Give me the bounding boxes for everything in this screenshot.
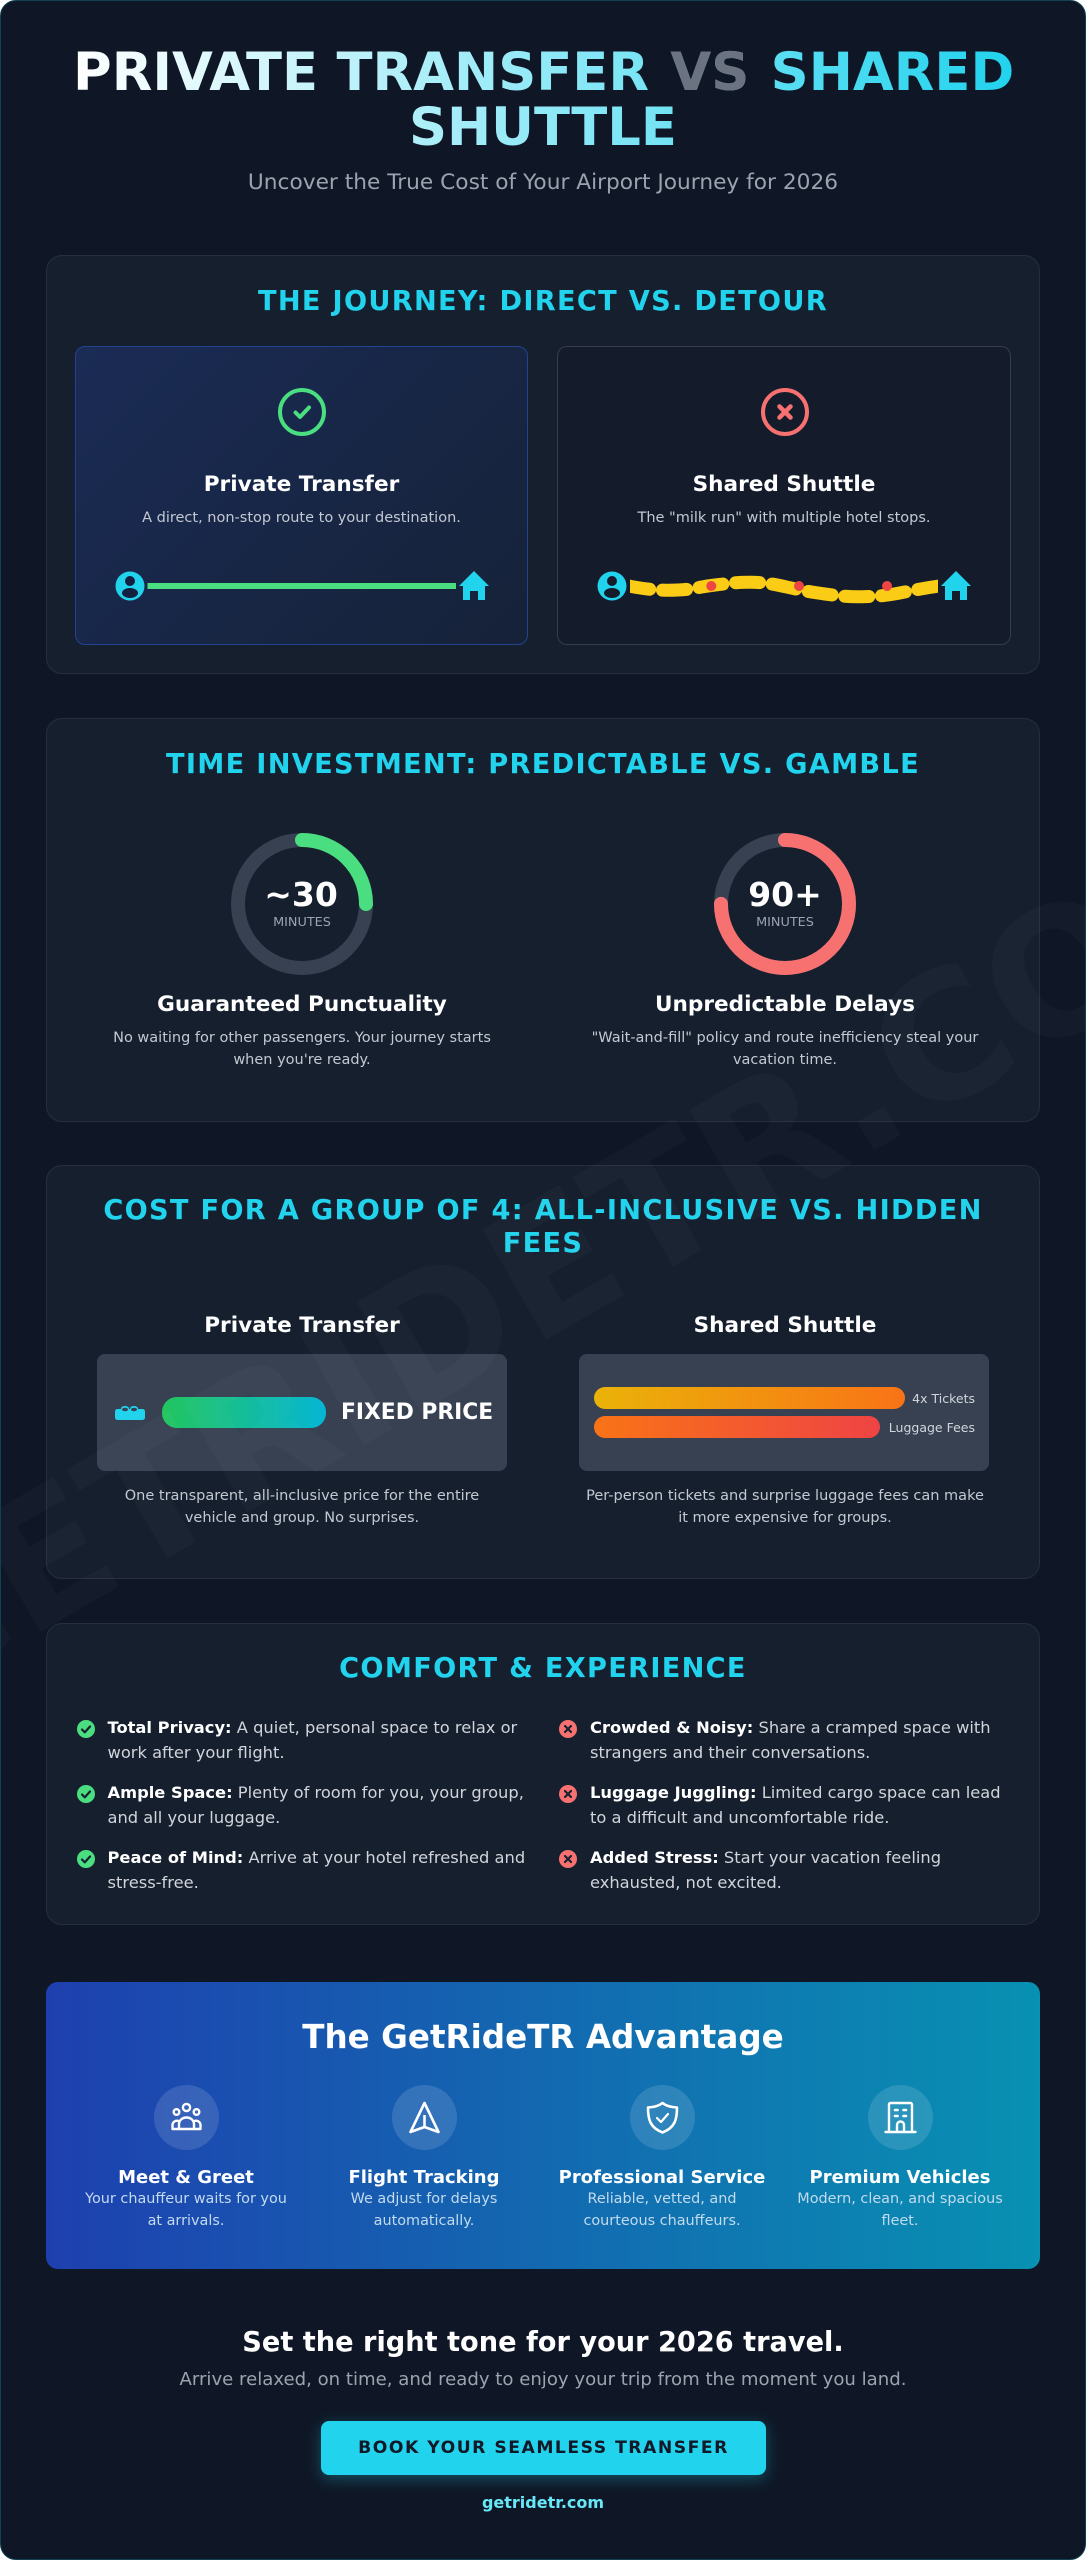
description: guaranteed punctuality: No waiting for other passengers. Your journey starts <box>113 1030 491 1046</box>
list item: luggage juggling: Luggage Juggling: Limited cargo space can lead <box>590 1783 1001 1802</box>
list item: crowded and noisy: Crowded & Noisy: Share a cramped space with <box>590 1718 991 1737</box>
card description: The "milk run" with multiple hotel stops. <box>637 510 931 526</box>
feature description <box>797 2191 1003 2229</box>
label: luggage fees: Luggage Fees <box>889 1420 975 1435</box>
list item: peace of mind: stress-free. <box>108 1873 199 1892</box>
card: private transfer route <box>75 346 528 645</box>
list item: added stress: exhausted, not excited. <box>590 1873 782 1892</box>
list item: total privacy: work after your flight. <box>108 1743 285 1762</box>
gauge value: ~30 <box>264 875 338 914</box>
bullet icon: cross <box>559 1785 577 1803</box>
list item: peace of mind <box>108 1848 525 1892</box>
list item: crowded and noisy <box>590 1718 991 1762</box>
list item: luggage juggling: to a difficult and uncomfortable ride. <box>590 1808 889 1827</box>
list item: ample space: Ample Space: Plenty of room for you, your group, <box>108 1783 524 1802</box>
title <box>73 45 1013 155</box>
feature description <box>583 2191 741 2229</box>
text: guaranteed punctuality: Guaranteed Punctuality <box>157 992 447 1017</box>
description: unpredictable delays <box>592 1030 978 1068</box>
card description: A direct, non-stop route to your destination. <box>142 510 461 526</box>
description: guaranteed punctuality <box>113 1030 491 1068</box>
subheading: private transfer: Private Transfer <box>204 1313 400 1338</box>
bullet icon: check <box>77 1785 95 1803</box>
bullet icon: check <box>77 1720 95 1738</box>
feature description: Modern, clean, and spacious <box>797 2191 1003 2207</box>
panel: advantage <box>46 1982 1040 2269</box>
description: shuttle cost: it more expensive for groups. <box>678 1510 892 1526</box>
direct route diagram <box>116 571 489 600</box>
description: unpredictable delays: "Wait-and-fill" policy and route inefficiency steal your <box>592 1030 978 1046</box>
list item: luggage juggling <box>590 1783 1001 1827</box>
gauge: 90+ minutes <box>714 833 856 975</box>
feature description: automatically. <box>374 2213 474 2229</box>
bar: tickets <box>594 1387 905 1409</box>
feature name: Professional Service <box>559 2167 765 2188</box>
card: shared shuttle route <box>557 346 1011 645</box>
heading: cost <box>103 1195 983 1259</box>
gauge: 30 minutes <box>231 833 373 975</box>
call to action button: BOOK YOUR SEAMLESS TRANSFER <box>358 2438 729 2458</box>
list item: ample space <box>108 1783 524 1827</box>
feature description <box>85 2191 287 2229</box>
description: shuttle cost <box>586 1488 984 1526</box>
feature description <box>351 2191 497 2229</box>
description: shuttle cost: Per-person tickets and surprise luggage fees can make <box>586 1488 984 1504</box>
heading: time investment: TIME INVESTMENT: PREDICTABLE VS. GAMBLE <box>166 749 920 780</box>
feature name: Flight Tracking <box>348 2167 500 2188</box>
heading: cost: COST FOR A GROUP OF 4: ALL-INCLUSIVE VS. HIDDEN <box>103 1195 983 1226</box>
description: guaranteed punctuality: when you're ready. <box>233 1052 371 1068</box>
bullet icon: cross <box>559 1850 577 1868</box>
icon: group <box>115 1406 145 1420</box>
list item: peace of mind: Peace of Mind: Arrive at your hotel refreshed and <box>108 1848 525 1867</box>
list item: added stress: Added Stress: Start your vacation feeling <box>590 1848 941 1867</box>
feature: meet and greet <box>85 2167 287 2229</box>
title: SHUTTLE <box>409 97 677 158</box>
icon: professional service <box>630 2085 695 2150</box>
feature: premium vehicles <box>797 2167 1003 2229</box>
description: private cost <box>125 1488 479 1526</box>
panel: the journey <box>46 255 1040 674</box>
closing headline: Set the right tone for your 2026 travel. <box>242 2327 844 2358</box>
gauge value: 90+ <box>748 875 822 914</box>
card title: Private Transfer <box>204 472 399 497</box>
feature description: at arrivals. <box>148 2213 224 2229</box>
panel: comfort <box>46 1623 1040 1925</box>
subtitle: Uncover the True Cost of Your Airport Journey for 2026 <box>248 170 838 195</box>
feature description: fleet. <box>882 2213 918 2229</box>
list item: crowded and noisy: strangers and their conversations. <box>590 1743 870 1762</box>
detour route diagram <box>598 571 971 604</box>
icon: green check circle <box>278 388 326 436</box>
title: PRIVATE TRANSFER VS SHARED <box>73 42 1014 103</box>
feature name: Premium Vehicles <box>810 2167 990 2188</box>
icon: premium vehicles <box>868 2085 933 2150</box>
icon: meet and greet <box>154 2085 219 2150</box>
feature: professional service <box>559 2167 765 2229</box>
card title: Shared Shuttle <box>693 472 875 497</box>
closing subtext: Arrive relaxed, on time, and ready to enjoy your trip from the moment you land. <box>180 2369 906 2390</box>
bar: luggage fees <box>594 1416 880 1438</box>
feature name: Meet & Greet <box>118 2167 254 2188</box>
feature: flight tracking <box>348 2167 500 2229</box>
website link: getridetr.com <box>482 2493 604 2512</box>
feature description: courteous chauffeurs. <box>583 2213 741 2229</box>
bar: fixed price <box>162 1397 326 1428</box>
feature description: Your chauffeur waits for you <box>85 2191 287 2207</box>
description: private cost: vehicle and group. No surprises. <box>185 1510 419 1526</box>
heading: the journey: THE JOURNEY: DIRECT VS. DETOUR <box>258 286 828 317</box>
list item: ample space: and all your luggage. <box>108 1808 280 1827</box>
subheading: shared shuttle: Shared Shuttle <box>694 1313 876 1338</box>
feature description: Reliable, vetted, and <box>587 2191 737 2207</box>
cost box: shuttle fees <box>579 1354 989 1471</box>
cost box: fixed price <box>97 1354 507 1471</box>
gauge unit: MINUTES <box>756 915 814 930</box>
heading: comfort: COMFORT & EXPERIENCE <box>339 1653 747 1684</box>
list item: total privacy: Total Privacy: A quiet, personal space to relax or <box>108 1718 517 1737</box>
gauge unit: MINUTES <box>273 915 331 930</box>
description: private cost: One transparent, all-inclusive price for the entire <box>125 1488 479 1504</box>
heading: cost: FEES <box>503 1228 583 1259</box>
label: fixed price: FIXED PRICE <box>341 1400 493 1425</box>
label: tickets: 4x Tickets <box>912 1391 975 1406</box>
list item: total privacy <box>108 1718 518 1762</box>
list item: added stress <box>590 1848 941 1892</box>
panel: cost <box>46 1165 1040 1579</box>
bullet icon: check <box>77 1850 95 1868</box>
panel: time investment <box>46 718 1040 1122</box>
call to action button <box>321 2421 766 2475</box>
text: unpredictable delays: Unpredictable Delays <box>655 992 915 1017</box>
description: unpredictable delays: vacation time. <box>733 1052 837 1068</box>
icon: flight tracking <box>392 2085 457 2150</box>
heading: advantage: The GetRideTR Advantage <box>302 2018 784 2056</box>
icon: red cross circle <box>761 388 809 436</box>
feature description: We adjust for delays <box>351 2191 497 2207</box>
bullet icon: cross <box>559 1720 577 1738</box>
